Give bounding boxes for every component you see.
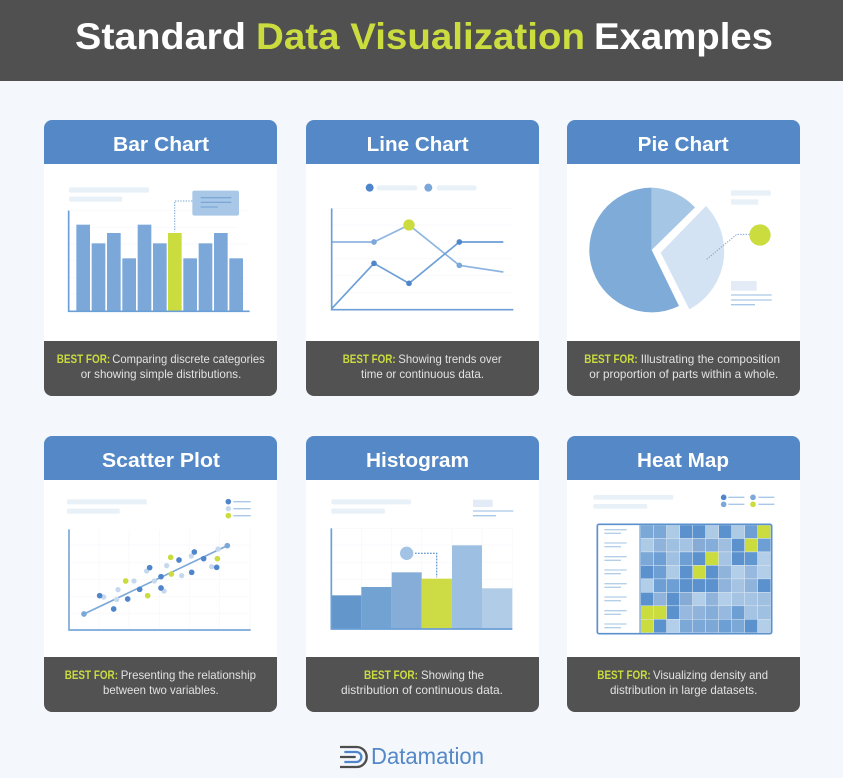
heading: heat map: Heat Map bbox=[637, 450, 729, 472]
text: best for: Showing the bbox=[421, 668, 484, 682]
chart: scatter bbox=[67, 499, 251, 630]
title banner: Standard bbox=[75, 16, 246, 57]
panel: histogram bbox=[306, 436, 539, 712]
text: best for: BEST FOR: bbox=[364, 668, 418, 682]
chart: histogram bbox=[331, 499, 513, 629]
text: best for bbox=[306, 341, 539, 396]
heading: line chart bbox=[306, 120, 539, 164]
text: best for bbox=[44, 341, 277, 396]
heading: histogram bbox=[306, 436, 539, 480]
text: best for: or proportion of parts within a whole. bbox=[589, 367, 778, 381]
text: best for: BEST FOR: bbox=[597, 668, 651, 682]
text: best for: or showing simple distributions. bbox=[81, 367, 241, 381]
icon: Datamation mark bbox=[340, 747, 367, 767]
panel: heat map bbox=[567, 436, 800, 712]
text: best for: Presenting the relationship bbox=[121, 668, 256, 682]
heading: pie chart bbox=[567, 120, 800, 164]
text: best for: distribution of continuous data. bbox=[341, 683, 503, 697]
heading: scatter plot: Scatter Plot bbox=[102, 450, 220, 472]
title banner: Data Visualization bbox=[256, 16, 585, 57]
text: best for: between two variables. bbox=[103, 683, 219, 697]
text: best for: BEST FOR: bbox=[65, 668, 118, 682]
text: best for: time or continuous data. bbox=[361, 367, 484, 381]
title banner bbox=[0, 0, 843, 81]
panel: scatter plot bbox=[44, 436, 277, 712]
heading: heat map bbox=[567, 436, 800, 480]
text: best for bbox=[567, 657, 800, 712]
panel: bar chart bbox=[44, 120, 277, 396]
chart: lines bbox=[332, 184, 513, 310]
text: best for bbox=[44, 657, 277, 712]
chart: pie bbox=[589, 188, 772, 312]
title banner: Examples bbox=[594, 16, 773, 57]
text: best for: Showing trends over bbox=[398, 352, 502, 366]
heading: scatter plot bbox=[44, 436, 277, 480]
text: best for: Comparing discrete categories bbox=[112, 352, 265, 366]
logo: Datamation: Datamation bbox=[371, 743, 484, 769]
text: best for bbox=[567, 341, 800, 396]
text: best for bbox=[306, 657, 539, 712]
heading: bar chart: Bar Chart bbox=[113, 134, 209, 156]
chart: bars bbox=[69, 187, 250, 311]
heading: line chart: Line Chart bbox=[367, 134, 469, 156]
text: best for: distribution in large datasets. bbox=[610, 683, 757, 697]
text: best for: BEST FOR: bbox=[57, 352, 110, 366]
text: best for: BEST FOR: bbox=[584, 352, 638, 366]
text: best for: BEST FOR: bbox=[343, 352, 396, 366]
heading: pie chart: Pie Chart bbox=[638, 134, 729, 156]
heading: bar chart bbox=[44, 120, 277, 164]
chart: heat map bbox=[593, 494, 774, 634]
text: best for: Visualizing density and bbox=[653, 668, 768, 682]
panel: line chart bbox=[306, 120, 539, 396]
panel: pie chart bbox=[567, 120, 800, 396]
heading: histogram: Histogram bbox=[366, 450, 469, 472]
text: best for: Illustrating the composition bbox=[641, 352, 780, 366]
